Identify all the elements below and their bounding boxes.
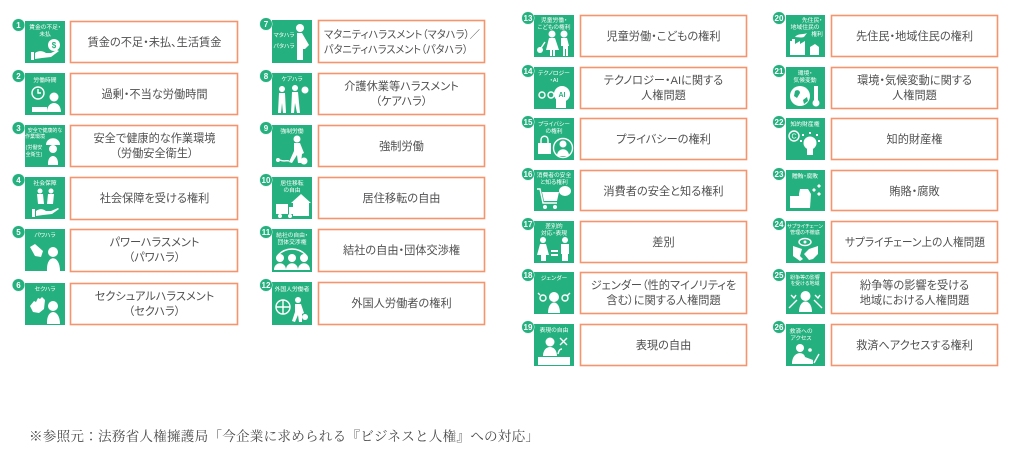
icon: copyright and light bulb: 知的財産権 — [790, 120, 820, 128]
icon: hand with coin — [25, 21, 65, 63]
icon: hand with coin: 賃金の不足・ — [29, 23, 61, 31]
label box 21: 環境・気候変動に関する — [857, 73, 972, 87]
icon: pregnant woman: マタハラ — [273, 31, 295, 39]
badge 7 — [260, 18, 272, 30]
badge 2: 2 — [16, 72, 21, 81]
badge 6 — [12, 279, 25, 291]
badge 10: 10 — [262, 176, 271, 185]
label box 19: 表現の自由 — [636, 338, 691, 352]
badge 4 — [12, 174, 25, 186]
badge 3: 3 — [16, 124, 21, 133]
icon: earth and thermometer: 気候変動 — [793, 76, 817, 84]
label box 3: 安全で健康的な作業環境 — [93, 131, 216, 145]
badge 25 — [773, 269, 785, 281]
icon: factory and house: 権利 — [811, 30, 823, 38]
badge 9: 9 — [264, 124, 269, 133]
item 23: corruption — [773, 168, 998, 211]
badge 26: 26 — [775, 323, 784, 332]
badge 8 — [260, 70, 272, 82]
icon: group of three people: 結社の自由・ — [276, 231, 308, 239]
badge 11 — [260, 226, 272, 238]
icon: two children — [534, 15, 574, 57]
label box 6 — [70, 284, 238, 324]
item 2: working hours — [12, 70, 238, 115]
label box 7: マタニティハラスメント（マタハラ）／ — [324, 28, 480, 41]
item 5: power harassment — [12, 226, 238, 272]
label box 5: パワーハラスメント — [109, 236, 199, 249]
icon: person at laptop: アクセス — [790, 335, 812, 342]
icon: hand holding family — [25, 177, 65, 219]
label box 4: 社会保障を受ける権利 — [100, 191, 209, 205]
badge 5 — [12, 226, 25, 238]
icon: person at laptop: 救済への — [789, 327, 813, 335]
label box 11: 結社の自由・団体交渉権 — [343, 243, 460, 257]
icon: eye above handshake: 管理の不徹底 — [790, 229, 820, 236]
item 16: consumers — [522, 168, 746, 211]
label box 14: 人権問題 — [641, 88, 686, 102]
icon: group of three people — [272, 229, 312, 272]
label box 13: 児童労働・こどもの権利 — [606, 29, 721, 43]
item 11: freedom of association — [260, 226, 484, 272]
label box 22 — [832, 118, 998, 160]
icon: truck and house — [272, 177, 312, 219]
label box 11 — [318, 230, 484, 272]
item 13: children — [522, 12, 746, 57]
label box 8 — [318, 74, 484, 114]
label box 23: 賄賂・腐敗 — [889, 184, 940, 198]
item 15: privacy — [522, 116, 746, 160]
label box 25: 地域における人権問題 — [860, 293, 969, 307]
icon: hand with coin: $ — [52, 41, 57, 50]
icon: copyright and light bulb — [786, 118, 825, 160]
item 25: conflict — [773, 269, 998, 314]
label box 12 — [318, 282, 484, 324]
item 18: gender — [522, 269, 746, 314]
label box 18: ジェンダー（性的マイノリティを — [591, 278, 736, 292]
icon: padlock and person: プライバシー — [538, 121, 570, 128]
icon: globe and traveler: 外国人労働者 — [275, 285, 310, 293]
label box 16: 消費者の安全と知る権利 — [603, 184, 724, 198]
label box 15 — [580, 118, 746, 160]
item 26: access to remedy — [773, 321, 998, 366]
icon: hand with coin: 未払 — [39, 30, 51, 38]
item 19: freedom of expression — [522, 321, 746, 366]
item 17: discrimination — [522, 218, 746, 263]
item 9: forced labor — [260, 122, 484, 167]
item 24: supply chain — [773, 218, 998, 263]
icon: person with gender symbols — [534, 272, 574, 314]
label box 2 — [70, 74, 238, 114]
source note: ※参照元：法務省人権擁護局「今企業に求められる『ビジネスと人権』への対応」 — [29, 428, 539, 444]
item 4: social security — [12, 174, 238, 220]
icon: two children: こどもの権利 — [537, 23, 571, 31]
icon: money bag and coins: 贈賄・腐敗 — [792, 172, 818, 180]
icon: copyright and light bulb: C — [791, 134, 797, 140]
icon: eye above handshake — [786, 221, 825, 263]
badge 17: 17 — [524, 220, 533, 229]
icon: group of three people: 団体交渉権 — [278, 238, 307, 246]
icon: shopping cart and speech bubble — [534, 170, 574, 211]
item 14: technology and AI — [522, 65, 746, 109]
badge 20: 20 — [775, 14, 784, 23]
badge 18: 18 — [524, 271, 533, 280]
badge 21: 21 — [775, 67, 784, 76]
label box 8: （ケアハラ） — [375, 95, 428, 108]
label box 5: （パワハラ） — [129, 251, 180, 264]
icon: person at laptop — [786, 324, 825, 366]
label box 15: プライバシーの権利 — [616, 132, 711, 146]
label box 1: 賃金の不足・未払、生活賃金 — [88, 35, 221, 49]
icon: pregnant woman — [272, 20, 312, 63]
label box 6: （セクハラ） — [129, 305, 180, 318]
badge 23: 23 — [775, 170, 784, 179]
label box 18: 含む）に関する人権問題 — [606, 293, 721, 307]
label box 5 — [70, 230, 238, 272]
badge 4: 4 — [16, 176, 21, 185]
badge 16 — [522, 168, 534, 180]
icon: raised hand and person — [25, 283, 65, 325]
badge 1: 1 — [16, 21, 21, 30]
label box 19 — [580, 324, 746, 366]
item 8: care harassment — [260, 70, 484, 115]
icon: AI head: テクノロジー — [538, 70, 570, 77]
label box 6: セクシュアルハラスメント — [95, 290, 214, 303]
icon: AI head — [534, 67, 574, 109]
badge 5: 5 — [16, 228, 21, 237]
badge 14: 14 — [524, 67, 533, 76]
icon: hand holding family: 社会保障 — [33, 179, 57, 187]
icon: pointing fist and person: パワハラ — [34, 232, 56, 239]
badge 22: 22 — [775, 118, 784, 127]
badge 1 — [12, 19, 25, 31]
icon: AI head: AI — [558, 92, 566, 99]
label box 10 — [318, 178, 484, 218]
icon: caregiver and elder: ケアハラ — [281, 76, 303, 83]
badge 22 — [773, 116, 785, 128]
icon: earth and thermometer: 環境・ — [798, 69, 812, 77]
label box 16 — [580, 170, 746, 210]
badge 13: 13 — [524, 14, 533, 23]
label box 17 — [580, 222, 746, 262]
badge 3 — [12, 122, 25, 134]
label box 23 — [832, 170, 998, 210]
badge 14 — [522, 65, 534, 77]
icon: worker with helmet: 全衛生) — [26, 151, 43, 158]
item 21: environment — [773, 65, 998, 109]
icon: caregiver and elder — [272, 73, 312, 115]
badge 25: 25 — [775, 271, 784, 280]
item 3: safety — [12, 122, 238, 167]
label box 7: パタニティハラスメント（パタハラ） — [324, 43, 468, 56]
badge 26 — [773, 321, 785, 333]
icon: person with ball and chain: 強制労働 — [280, 127, 304, 135]
label box 14 — [580, 68, 746, 108]
badge 11: 11 — [262, 228, 271, 237]
label box 3: （労働安全衛生） — [115, 146, 194, 160]
icon: factory and house — [786, 15, 825, 57]
icon: worker with helmet: 作業環境 — [25, 133, 45, 140]
icon: clock and worker: 労働時間 — [33, 76, 57, 84]
badge 15 — [522, 116, 534, 128]
badge 19 — [522, 321, 534, 333]
label box 20: 先住民・地域住民の権利 — [856, 29, 973, 43]
badge 12 — [260, 279, 272, 291]
badge 10 — [260, 174, 272, 186]
label box 1 — [70, 22, 238, 62]
icon: woman equals man: 対応・表現 — [541, 229, 567, 237]
item 10: freedom of movement — [260, 174, 484, 219]
icon: person with ball and chain — [272, 125, 312, 167]
label box 3 — [70, 126, 238, 166]
item 22: intellectual property — [773, 116, 998, 160]
label box 22: 知的財産権 — [887, 132, 942, 146]
icon: woman equals man: 差別的 — [545, 222, 563, 230]
badge 12: 12 — [262, 281, 271, 290]
icon: person amid conflict: 紛争等の影響 — [790, 274, 820, 281]
icon: two children: 児童労働・ — [541, 16, 567, 24]
icon: worker with helmet — [25, 125, 65, 167]
label box 20 — [832, 16, 998, 56]
icon: factory and house: 先住民・ — [802, 16, 822, 24]
label box 8: 介護休業等ハラスメント — [344, 79, 459, 93]
icon: shopping cart and speech bubble: 消費者の安全 — [537, 171, 571, 179]
icon: speaker at podium: 表現の自由 — [540, 326, 569, 334]
icon: shopping cart and speech bubble: と知る権利 — [540, 178, 568, 186]
badge 15: 15 — [524, 118, 533, 127]
label box 24: サプライチェーン上の人権問題 — [845, 235, 985, 249]
badge 23 — [773, 168, 785, 180]
icon: globe and traveler — [272, 282, 312, 325]
label box 26: 救済へアクセスする権利 — [856, 338, 973, 352]
label box 2: 過剰・不当な労働時間 — [101, 87, 208, 101]
label box 4 — [70, 178, 238, 220]
icon: money bag and coins — [786, 170, 825, 211]
label box 13 — [580, 16, 746, 56]
badge 7: 7 — [264, 20, 269, 29]
badge 8: 8 — [264, 72, 269, 81]
item 20: indigenous people — [773, 12, 998, 57]
badge 18 — [522, 269, 534, 281]
label box 25: 紛争等の影響を受ける — [860, 278, 969, 292]
item 7: maternity harassment — [260, 18, 484, 63]
label box 25 — [832, 272, 998, 314]
icon: person with gender symbols: ジェンダー — [541, 274, 568, 282]
icon: truck and house: の自由 — [283, 186, 301, 194]
badge 9 — [260, 122, 272, 134]
icon: speaker at podium — [534, 324, 574, 366]
badge 2 — [12, 70, 25, 82]
icon: person amid conflict — [786, 272, 825, 314]
label box 10: 居住移転の自由 — [363, 191, 440, 205]
icon: factory and house: 地域住民の — [791, 23, 820, 31]
icon: padlock and person: の権利 — [545, 127, 563, 135]
label box 26 — [832, 324, 998, 366]
badge 6: 6 — [16, 281, 21, 290]
badge 24: 24 — [775, 220, 784, 229]
icon: truck and house: 居住移転 — [280, 179, 304, 187]
badge 20 — [773, 12, 785, 24]
icon: worker with helmet: 安全で健康的な — [28, 127, 62, 134]
icon: raised hand and person: セクハラ — [34, 286, 56, 293]
badge 19: 19 — [524, 323, 533, 332]
icon: clock and worker — [25, 73, 65, 115]
label box 17: 差別 — [652, 236, 675, 249]
label box 21: 人権問題 — [892, 88, 937, 102]
item 6: sexual harassment — [12, 279, 238, 325]
label box 9 — [318, 126, 484, 166]
icon: worker with helmet: (労働安 — [26, 144, 42, 151]
icon: pregnant woman: パタハラ — [273, 42, 295, 50]
icon: eye above handshake: サプライチェーン — [787, 224, 823, 230]
icon: woman equals man — [534, 221, 574, 263]
label box 14: テクノロジー・AIに関する — [604, 74, 723, 87]
badge 17 — [522, 218, 534, 230]
badge 16: 16 — [524, 170, 533, 179]
item 12: foreign workers — [260, 279, 484, 325]
label box 9: 強制労働 — [379, 139, 424, 153]
label box 24 — [832, 222, 998, 262]
icon: padlock and person — [534, 118, 574, 160]
icon: person amid conflict: を受ける地域 — [790, 280, 819, 287]
label box 21 — [832, 68, 998, 108]
icon: pointing fist and person — [25, 229, 65, 271]
label box 7 — [318, 20, 484, 62]
badge 21 — [773, 65, 785, 77]
icon: earth and thermometer — [786, 67, 825, 109]
label box 12: 外国人労働者の権利 — [351, 296, 452, 310]
item 1: wages — [12, 19, 238, 63]
label box 18 — [580, 272, 746, 314]
icon: AI head: ・AI — [550, 78, 559, 84]
badge 13 — [522, 12, 534, 24]
badge 24 — [773, 218, 785, 230]
